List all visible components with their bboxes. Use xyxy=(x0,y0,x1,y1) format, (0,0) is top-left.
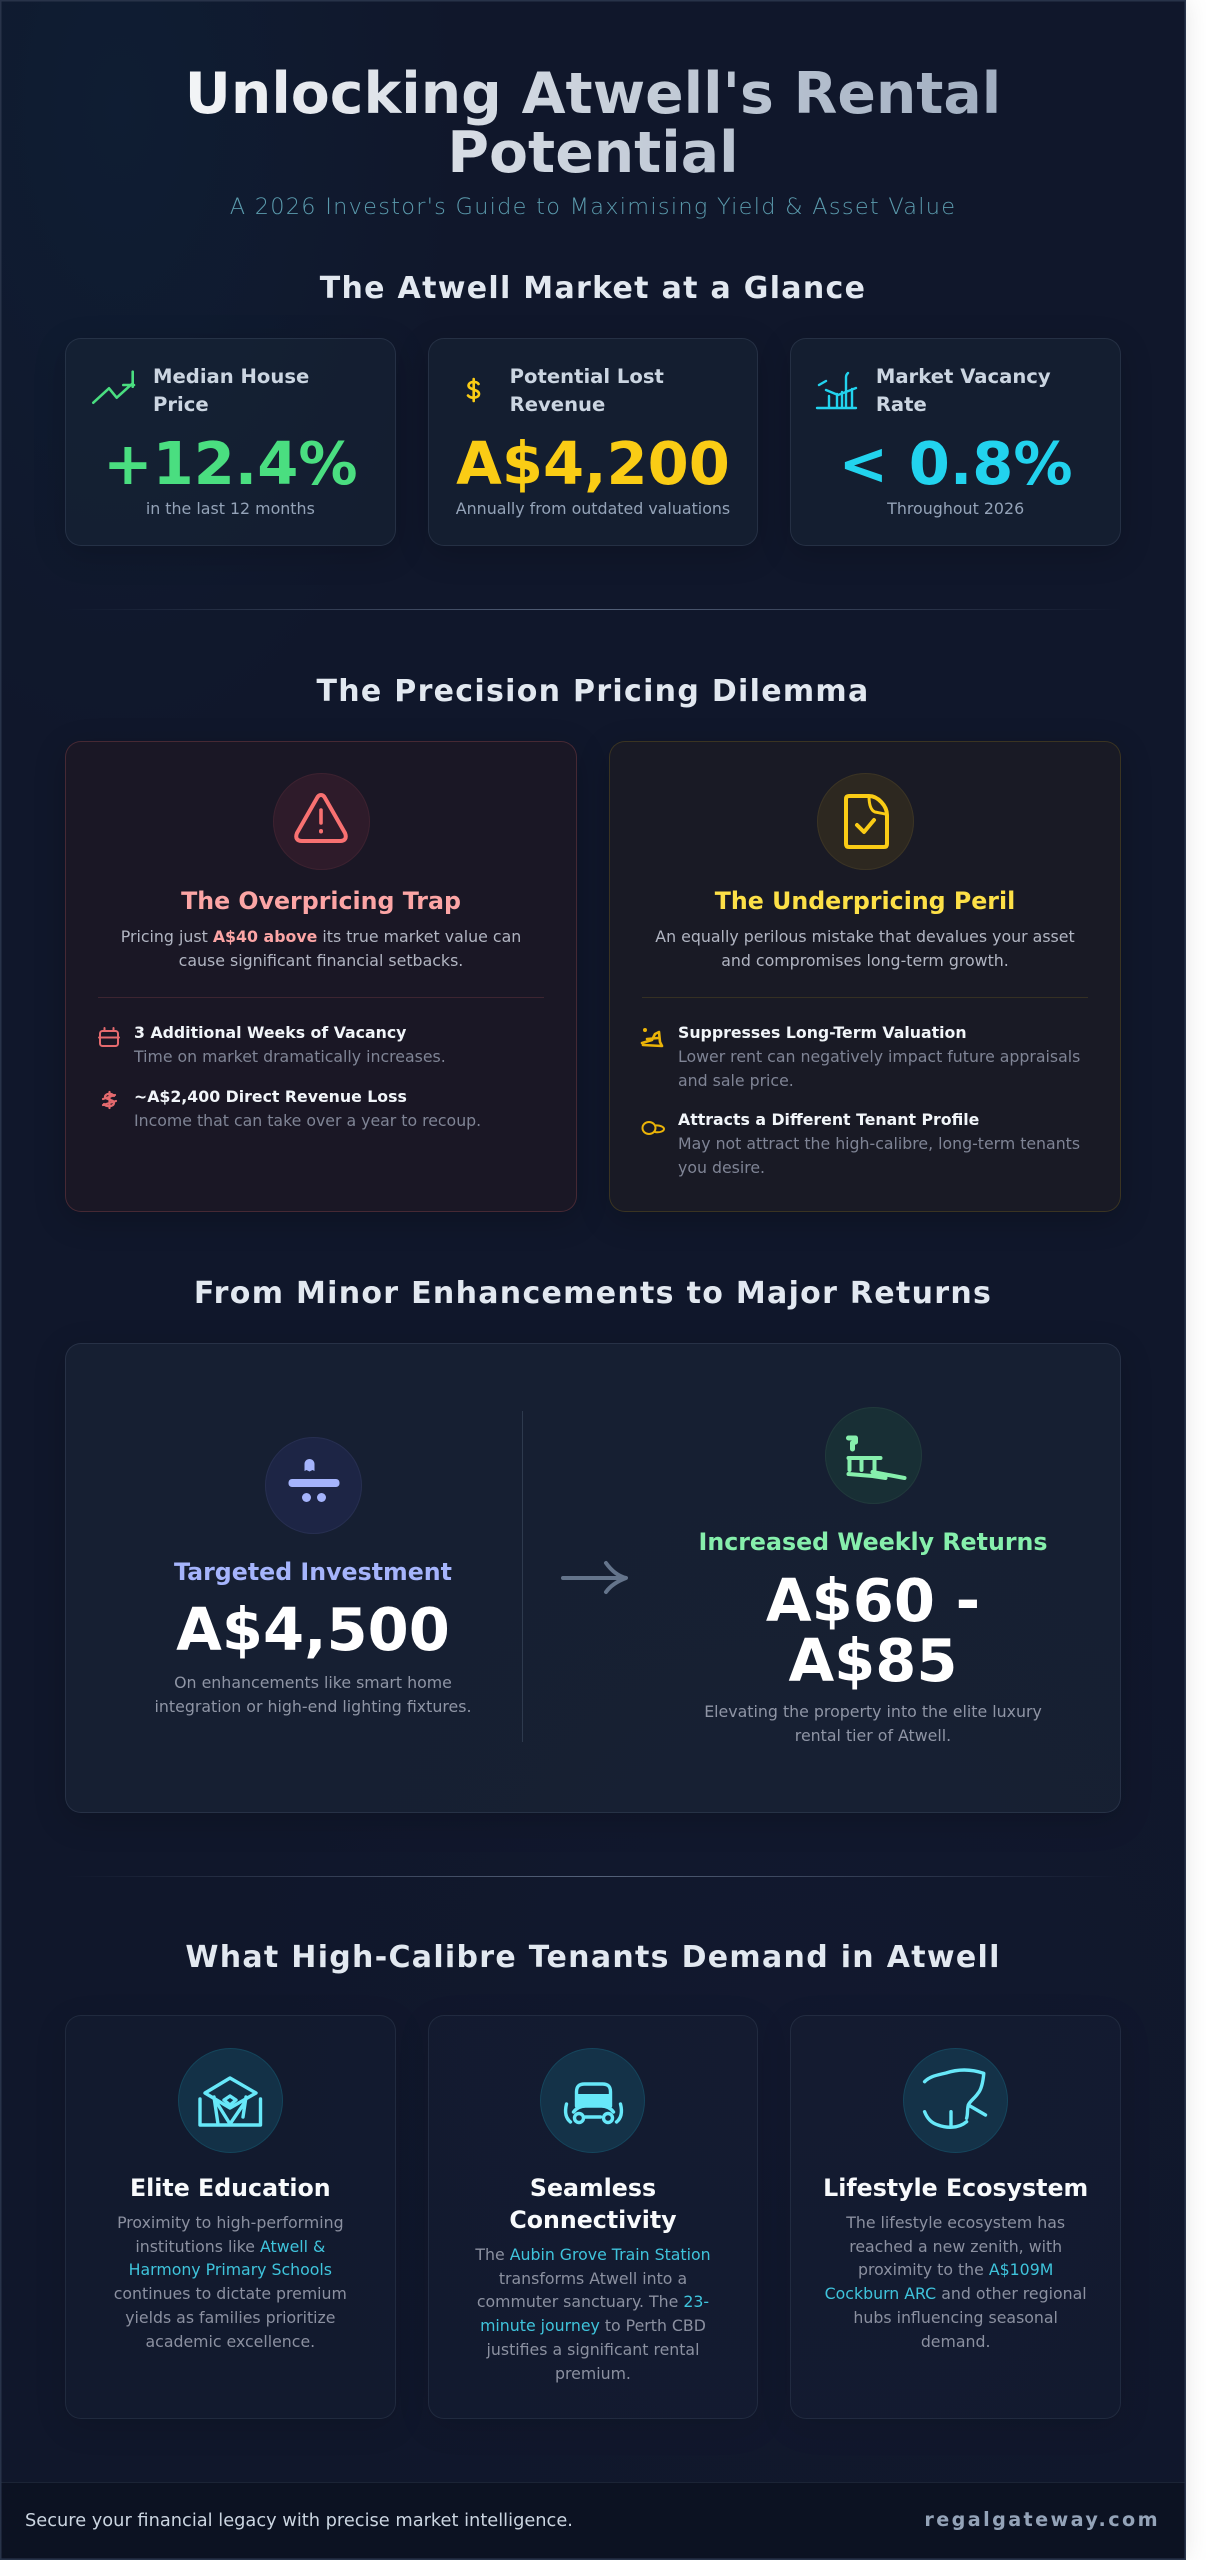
description: integration or high-end lighting fixtures. xyxy=(154,1697,471,1716)
title: Potential xyxy=(447,120,739,186)
panel: lifestyle ecosystem xyxy=(790,2015,1121,2419)
item: tenant profile xyxy=(678,1110,1080,1177)
footer tagline: Secure your financial legacy with precise market intelligence. xyxy=(25,2510,573,2531)
icon: calendar xyxy=(98,1027,120,1047)
icon: investment xyxy=(264,1437,362,1534)
heading: tenant demands: What High-Calibre Tenants Demand in Atwell xyxy=(185,1940,1001,1975)
panel: potential lost revenue xyxy=(428,338,758,546)
icon: revenue loss xyxy=(102,1090,118,1110)
panel: elite education xyxy=(65,2015,396,2419)
label xyxy=(153,365,309,416)
title: Unlocking Atwell's Rental xyxy=(185,60,1001,126)
body text: The lifestyle ecosystem has xyxy=(846,2213,1065,2232)
item: valuation: and sale price. xyxy=(678,1071,794,1090)
body text: Proximity to high-performing xyxy=(117,2213,344,2232)
icon: dollar xyxy=(466,378,480,402)
icon: valuation chart xyxy=(640,1028,664,1048)
card heading: Elite Education xyxy=(130,2174,331,2202)
block heading: Targeted Investment xyxy=(174,1558,452,1586)
item: vacancy: 3 Additional Weeks of Vacancy xyxy=(134,1023,406,1042)
body text: demand. xyxy=(921,2332,990,2351)
body text: commuter sanctuary. The 23- xyxy=(477,2292,709,2311)
icon: tenant profile xyxy=(642,1121,665,1135)
body text xyxy=(825,2213,1087,2351)
arrow xyxy=(561,1560,628,1594)
caption: in the last 12 months xyxy=(146,499,315,518)
body text: reached a new zenith, with xyxy=(849,2237,1062,2256)
body text: Cockburn ARC and other regional xyxy=(825,2284,1087,2303)
panel: enhancements to returns xyxy=(65,1343,1121,1813)
icon: document check xyxy=(816,773,914,870)
item: tenant profile: May not attract the high-calibre, long-term tenants xyxy=(678,1134,1080,1153)
item: valuation: Lower rent can negatively impact future appraisals xyxy=(678,1047,1080,1066)
description: Elevating the property into the elite luxury xyxy=(704,1702,1042,1721)
value xyxy=(766,1566,980,1694)
description: On enhancements like smart home xyxy=(174,1673,452,1692)
website: regalgateway.com xyxy=(924,2508,1160,2531)
panel heading: The Overpricing Trap xyxy=(181,887,461,915)
description xyxy=(154,1673,471,1716)
description: An equally perilous mistake that devalues your asset xyxy=(655,927,1075,946)
item: tenant profile: Attracts a Different Tenant Profile xyxy=(678,1110,979,1129)
icon: car xyxy=(540,2048,645,2153)
body text: transforms Atwell into a xyxy=(499,2269,687,2288)
card heading: Lifestyle Ecosystem xyxy=(823,2174,1088,2202)
body text xyxy=(475,2245,711,2383)
panel: median house price xyxy=(65,338,396,546)
item: valuation: Suppresses Long-Term Valuation xyxy=(678,1023,967,1042)
heading: enhancements: From Minor Enhancements to Major Returns xyxy=(194,1276,992,1311)
value: A$4,200 xyxy=(456,429,730,498)
icon: warning triangle xyxy=(272,773,370,870)
item: revenue loss: Income that can take over a year to recoup. xyxy=(134,1111,481,1130)
label xyxy=(510,365,664,416)
caption: Annually from outdated valuations xyxy=(456,499,730,518)
value: A$4,500 xyxy=(176,1595,450,1664)
description xyxy=(655,927,1075,970)
label: Rate xyxy=(876,393,927,416)
description: and compromises long-term growth. xyxy=(721,951,1009,970)
subtitle: A 2026 Investor's Guide to Maximising Yield & Asset Value xyxy=(230,194,956,220)
panel: seamless connectivity xyxy=(428,2015,758,2419)
icon: weekly returns xyxy=(824,1407,922,1504)
item: vacancy xyxy=(134,1023,446,1066)
label: Price xyxy=(153,393,209,416)
body text: proximity to the A$109M xyxy=(858,2260,1053,2279)
body text: premium. xyxy=(555,2364,631,2383)
label: Potential Lost xyxy=(510,365,664,388)
panel: overpricing trap xyxy=(65,741,577,1212)
card heading: Seamless xyxy=(530,2174,656,2202)
caption: Throughout 2026 xyxy=(887,499,1024,518)
card heading: Connectivity xyxy=(509,2206,677,2234)
panel: market vacancy rate xyxy=(790,338,1121,546)
panel: underpricing peril xyxy=(609,741,1121,1212)
item: revenue loss: ~A$2,400 Direct Revenue Loss xyxy=(134,1087,407,1106)
label: Revenue xyxy=(510,393,605,416)
heading: pricing dilemma: The Precision Pricing Dilemma xyxy=(316,674,870,709)
icon: education xyxy=(178,2048,283,2153)
description: cause significant financial setbacks. xyxy=(179,951,463,970)
item: vacancy: Time on market dramatically increases. xyxy=(134,1047,446,1066)
heading: market at a glance: The Atwell Market at a Glance xyxy=(320,271,866,306)
icon: trend line xyxy=(92,370,136,404)
body text: minute journey to Perth CBD xyxy=(480,2316,706,2335)
body text: The Aubin Grove Train Station xyxy=(475,2245,711,2264)
description xyxy=(121,927,521,970)
description: Pricing just A$40 above its true market value can xyxy=(121,927,521,946)
label: Market Vacancy xyxy=(876,365,1051,388)
description xyxy=(704,1702,1042,1745)
icon: lifestyle xyxy=(903,2048,1008,2153)
body text xyxy=(114,2213,347,2351)
value: A$60 - xyxy=(766,1566,980,1634)
block heading: Increased Weekly Returns xyxy=(699,1528,1047,1556)
body text: hubs influencing seasonal xyxy=(853,2308,1058,2327)
body text: justifies a significant rental xyxy=(487,2340,699,2359)
value: A$85 xyxy=(788,1626,958,1694)
body text: yields as families prioritize xyxy=(125,2308,335,2327)
item: valuation xyxy=(678,1023,1080,1090)
label xyxy=(876,365,1051,416)
card heading xyxy=(509,2174,677,2234)
panel heading: The Underpricing Peril xyxy=(715,887,1015,915)
body text: continues to dictate premium xyxy=(114,2284,347,2303)
description: rental tier of Atwell. xyxy=(795,1726,951,1745)
value: < 0.8% xyxy=(839,429,1073,498)
item: tenant profile: you desire. xyxy=(678,1158,765,1177)
value: +12.4% xyxy=(103,429,358,498)
label: Median House xyxy=(153,365,309,388)
body text: Harmony Primary Schools xyxy=(129,2260,332,2279)
icon: bar chart xyxy=(816,372,858,410)
item: revenue loss xyxy=(134,1087,481,1130)
body text: institutions like Atwell & xyxy=(135,2237,325,2256)
title xyxy=(65,64,1121,182)
footer xyxy=(0,2482,1186,2558)
body text: academic excellence. xyxy=(146,2332,315,2351)
